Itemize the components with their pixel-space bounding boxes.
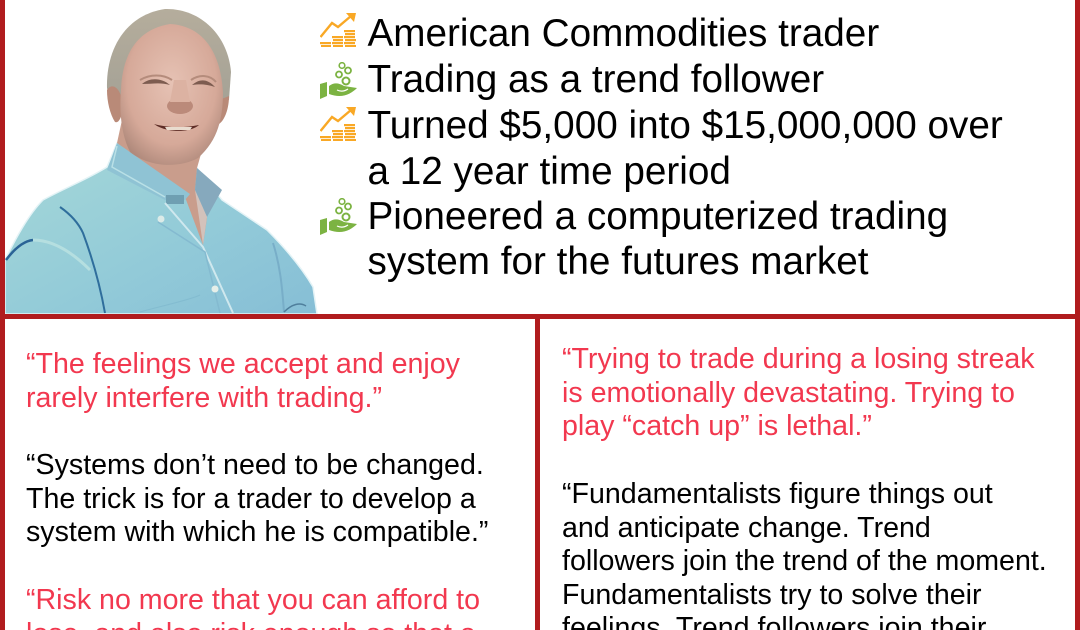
icon: green hand with coins <box>320 198 357 235</box>
quote: losing streak <box>562 343 1035 442</box>
quote: systems don't need to be changed: The trick is for a trader to develop a <box>26 482 476 514</box>
bullet: Turned $5,000 into $15,000,000: Turned $5,000 into $15,000,000 over <box>368 104 1003 147</box>
quote: feelings we accept <box>26 348 460 414</box>
quote: fundamentalists: and anticipate change. Trend <box>562 512 931 544</box>
quote: fundamentalists: Fundamentalists try to solve their <box>562 578 982 610</box>
hair back <box>107 9 231 100</box>
quote: fundamentalists: followers join the trend of the moment. <box>562 545 1047 577</box>
quote: fundamentalists: “Fundamentalists figure things out <box>562 478 993 510</box>
nose <box>167 98 193 114</box>
left collar <box>107 143 190 200</box>
neck and chest <box>117 120 207 245</box>
quote: fundamentalists <box>562 478 1047 630</box>
quote: feelings we accept: “The feelings we accept and enjoy <box>26 348 460 380</box>
quote: feelings we accept: rarely interfere with trading.” <box>26 382 382 414</box>
quote: losing streak: play “catch up” is lethal.” <box>562 410 872 442</box>
quote: losing streak: is emotionally devastating. Trying to <box>562 376 1015 408</box>
quote: systems don't need to be changed: system with which he is compatible.” <box>26 516 488 548</box>
face <box>120 24 223 165</box>
quote: risk no more <box>26 584 480 630</box>
mouth <box>154 124 199 131</box>
bullet: Pioneered a computerized trading system: Pioneered a computerized trading <box>368 195 948 238</box>
bullet: Trading as a trend follower: Trading as a trend follower <box>368 58 824 101</box>
ears <box>107 86 123 122</box>
bullet: Pioneered a computerized trading system <box>368 195 948 283</box>
buttons <box>158 216 164 222</box>
bullet: Pioneered a computerized trading system: system for the futures market <box>368 240 868 283</box>
bullet: Turned $5,000 into $15,000,000 <box>368 104 1003 193</box>
quote: losing streak: “Trying to trade during a losing streak <box>562 343 1035 375</box>
icon: gold coins and rising arrow <box>320 107 356 141</box>
bullet: Turned $5,000 into $15,000,000: a 12 year time period <box>368 150 731 193</box>
quote: systems don't need to be changed <box>26 449 488 548</box>
quote: systems don't need to be changed: “Systems don’t need to be changed. <box>26 449 484 481</box>
eyes <box>142 79 170 85</box>
right collar <box>195 168 222 217</box>
sleeve seams <box>60 207 105 313</box>
shirt body <box>5 143 317 314</box>
placket <box>165 203 233 313</box>
bullet: American Commodities trader: American Commodities trader <box>368 12 879 55</box>
icon: gold coins and rising arrow <box>320 13 356 47</box>
quote: risk no more: “Risk no more that you can afford to <box>26 584 480 616</box>
portrait: man in blue shirt <box>5 9 318 314</box>
icon: green hand with coins <box>320 62 357 99</box>
